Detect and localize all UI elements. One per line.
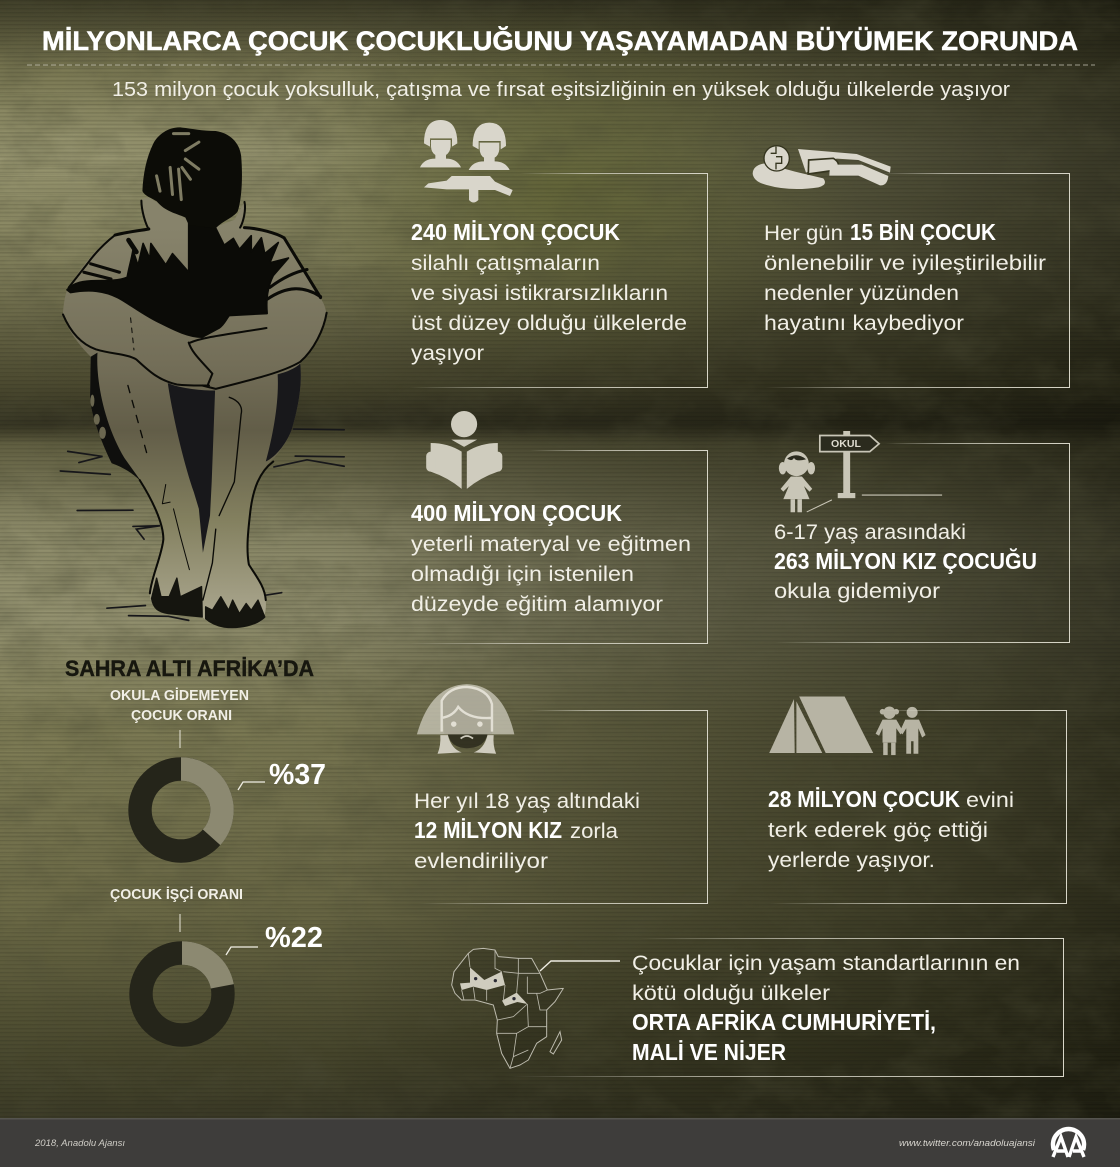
body skin — [63, 197, 326, 628]
panel: worst living standards: ORTA AFRİKA CUMHURİYETİ, — [632, 1009, 936, 1035]
sign label: OKUL — [831, 438, 862, 450]
shirt — [67, 223, 288, 337]
heading: SAHRA ALTI AFRİKA’DA — [65, 656, 314, 681]
donut label: out of school — [110, 687, 249, 724]
panel: deaths: nedenler yüzünden — [764, 281, 959, 305]
value: 37 percent: %37 — [269, 759, 326, 791]
donut label: out of school: ÇOCUK ORANI — [131, 708, 232, 724]
text block: 28 MİLYON ÇOCUK — [768, 786, 960, 812]
text block: Çocuklar için yaşam standartlarının en — [632, 951, 1020, 975]
shadows between and beside legs — [90, 353, 301, 553]
panel: soldiers — [410, 120, 708, 388]
panel: deaths: 15 BİN ÇOCUK — [850, 219, 996, 245]
panel: soldiers: yaşıyor — [411, 341, 484, 365]
icon: soldiers and rifle — [420, 120, 513, 202]
panel: girls out of school — [774, 431, 1070, 643]
panel: worst living standards — [452, 938, 1064, 1077]
footer bar — [0, 1118, 1120, 1167]
logo: AA — [1053, 1129, 1084, 1157]
text block: Her gün — [764, 221, 843, 245]
panel: deaths: önlenebilir ve iyileştirilebilir — [764, 251, 1046, 275]
hair — [142, 127, 242, 228]
text block: 6-17 yaş arasındaki — [774, 520, 966, 544]
panel: displaced children: evini — [966, 788, 1014, 812]
icon: girl and school sign — [779, 431, 942, 512]
panel: forced marriage: zorla — [570, 819, 618, 843]
illustration: sitting child — [60, 127, 344, 628]
panel: education: olmadığı için istenilen — [411, 562, 634, 586]
credit: 2018, Anadolu Ajansı — [34, 1138, 125, 1149]
icon: africa map — [452, 948, 563, 1068]
panel: education — [410, 411, 708, 644]
text block: 240 MİLYON ÇOCUK — [411, 219, 620, 245]
donut chart: 22 percent — [141, 953, 223, 1035]
panel: forced marriage: 12 MİLYON KIZ — [414, 817, 562, 843]
icon: tent and children — [769, 697, 926, 755]
text block: Her yıl 18 yaş altındaki — [414, 789, 640, 813]
shirt stripes — [69, 228, 321, 299]
subtitle: 153 milyon çocuk yoksulluk, çatışma ve fırsat eşitsizliğinin en yüksek olduğu ülkelerde yaşıyor — [112, 78, 1010, 101]
panel: deaths: hayatını kaybediyor — [764, 311, 964, 335]
panel: soldiers: üst düzey olduğu ülkelerde — [411, 311, 687, 335]
panel: girls out of school: okula gidemiyor — [774, 579, 940, 603]
toes shadow — [152, 578, 265, 628]
panel: sub-saharan africa stats — [65, 656, 326, 1035]
donut label: child labour: ÇOCUK İŞÇİ ORANI — [110, 886, 243, 903]
icon: reader with book — [426, 411, 502, 489]
knee lace marks — [90, 395, 106, 439]
panel: forced marriage: evlendiriliyor — [414, 849, 548, 873]
panel: forced marriage — [414, 684, 708, 904]
icon: bride with veil — [417, 684, 514, 754]
title: MİLYONLARCA ÇOCUK ÇOCUKLUĞUNU YAŞAYAMADAN BÜYÜMEK ZORUNDA — [42, 25, 1078, 56]
panel: worst living standards: kötü olduğu ülkeler — [632, 981, 830, 1005]
twitter url: www.twitter.com/anadoluajansi — [899, 1138, 1036, 1149]
panel: soldiers: ve siyasi istikrarsızlıkların — [411, 281, 668, 305]
panel: displaced children — [768, 697, 1067, 904]
donut label: out of school: OKULA GİDEMEYEN — [110, 687, 249, 704]
text block: 400 MİLYON ÇOCUK — [411, 500, 622, 526]
value: 22 percent: %22 — [265, 922, 323, 954]
outlines — [63, 201, 327, 600]
panel: worst living standards: MALİ VE NİJER — [632, 1039, 786, 1065]
donut chart: 37 percent — [140, 769, 222, 851]
panel: displaced children: terk ederek göç ettiği — [768, 818, 988, 842]
panel: soldiers: silahlı çatışmaların — [411, 251, 600, 275]
icon: lying child — [753, 146, 891, 189]
panel: deaths — [753, 146, 1070, 388]
panel: girls out of school: 263 MİLYON KIZ ÇOCUĞU — [774, 547, 1037, 574]
floor strokes — [60, 429, 344, 620]
panel: education: düzeyde eğitim alamıyor — [411, 592, 663, 616]
panel: education: yeterli materyal ve eğitmen — [411, 532, 691, 556]
panel: displaced children: yerlerde yaşıyor. — [768, 848, 935, 872]
